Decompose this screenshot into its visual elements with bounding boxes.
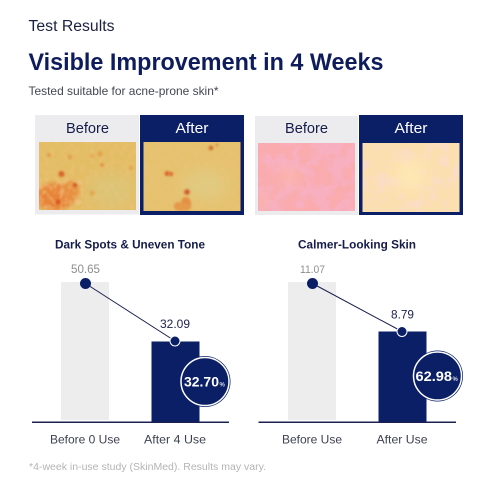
panel: dark spots before photo: Before: [66, 120, 109, 137]
footnote: *4-week in-use study (SkinMed). Results may vary.: [29, 462, 266, 473]
chart title: Dark Spots & Uneven Tone: [55, 240, 205, 252]
axis line: [258, 422, 456, 423]
panel: dark spots before photo: [35, 115, 139, 214]
x label: before: Before 0 Use: [50, 432, 120, 446]
subtitle: Tested suitable for acne-prone skin*: [28, 84, 219, 98]
panel: calmer skin after photo: [359, 115, 463, 215]
panel: calmer skin after photo: After: [394, 120, 428, 137]
marker: before: [307, 278, 318, 289]
x label: after: After 4 Use: [144, 432, 206, 446]
bar: before: [61, 282, 109, 420]
chart: dark spots and uneven tone: [32, 240, 230, 446]
trend line: [312, 284, 402, 332]
panel: dark spots after photo: [140, 115, 244, 215]
marker: after: [170, 336, 180, 346]
bar: after: [378, 332, 426, 423]
badge: 32.70%: %: [220, 382, 226, 388]
bar: after: [152, 342, 200, 423]
chart title: Calmer-Looking Skin: [298, 240, 416, 252]
x label: before: Before Use: [282, 432, 342, 446]
badge: 62.98%: [412, 350, 463, 402]
value: 8.79: 8.79: [391, 310, 414, 322]
value: 50.65: 50.65: [71, 264, 100, 276]
badge: 32.70%: [180, 356, 230, 407]
bar: before: [288, 282, 336, 420]
badge: 62.98%: %: [452, 377, 458, 383]
badge: 62.98%: 62.98: [416, 368, 452, 384]
marker: before: [80, 278, 91, 289]
chart: calmer-looking skin: [258, 240, 463, 446]
panel: dark spots after photo: After: [176, 120, 208, 137]
eyebrow: Test Results: Test Results: [28, 18, 115, 35]
panel: calmer skin before photo: Before: [285, 120, 328, 137]
value: 11.07: 11.07: [300, 264, 325, 276]
marker: after: [397, 326, 407, 336]
badge: 32.70%: 32.70: [184, 374, 219, 390]
trend line: [86, 284, 175, 341]
x label: after: After Use: [376, 432, 428, 446]
title: Visible Improvement in 4 Weeks: [28, 49, 384, 76]
axis line: [32, 422, 229, 423]
panel: calmer skin before photo: [252, 116, 358, 215]
value: 32.09: 32.09: [160, 319, 190, 331]
